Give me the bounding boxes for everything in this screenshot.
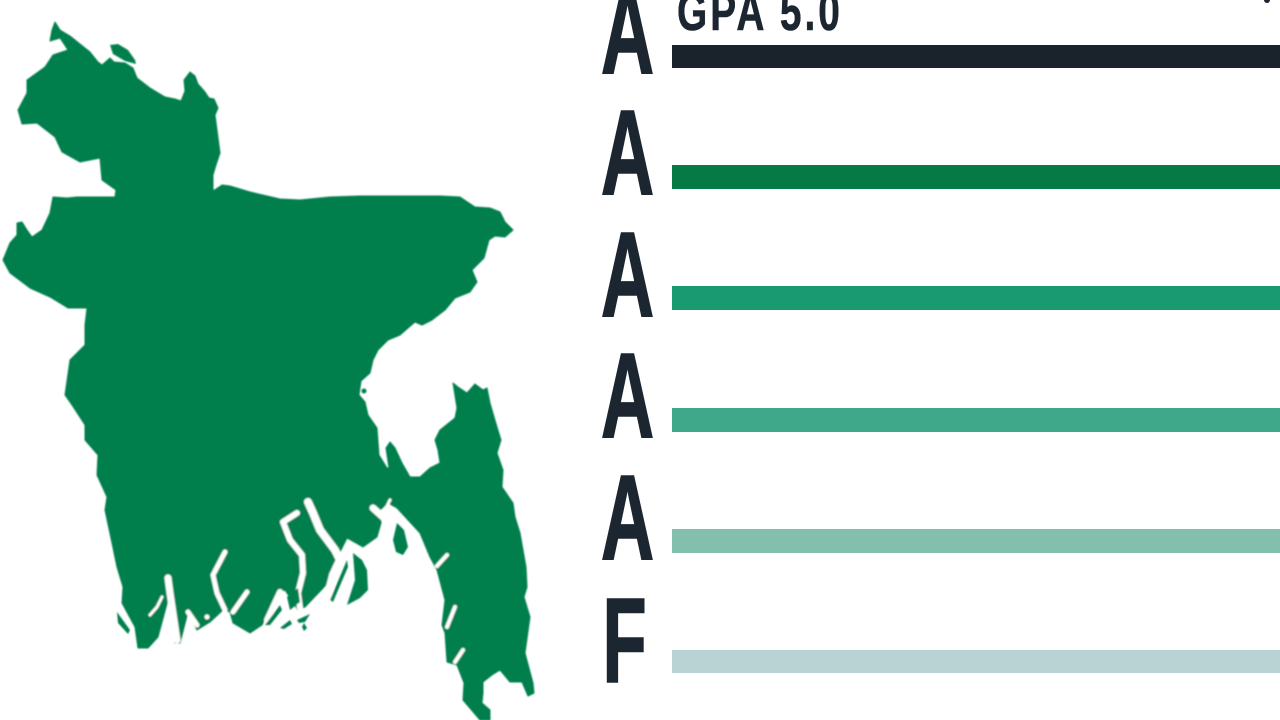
bar 4 bbox=[672, 408, 1280, 432]
delta islands bbox=[117, 388, 452, 634]
grade letter A, row 5: A bbox=[601, 450, 654, 586]
grade letter F: F bbox=[602, 574, 647, 709]
cropped text fragment, top right bbox=[1264, 0, 1270, 3]
bar 6 bbox=[672, 650, 1280, 673]
bar 5 bbox=[672, 529, 1280, 553]
island: north notch bbox=[110, 44, 136, 64]
bar 3 bbox=[672, 286, 1280, 310]
grade letter A, row 2: A bbox=[601, 85, 654, 221]
bar 1 bbox=[672, 45, 1280, 68]
grade letter A, row 4: A bbox=[601, 328, 654, 464]
delta rivers bbox=[150, 500, 463, 662]
bar 2 bbox=[672, 165, 1280, 189]
map of Bangladesh bbox=[3, 22, 534, 720]
river dot bbox=[204, 614, 210, 620]
grade letter A, row 3: A bbox=[601, 207, 654, 343]
